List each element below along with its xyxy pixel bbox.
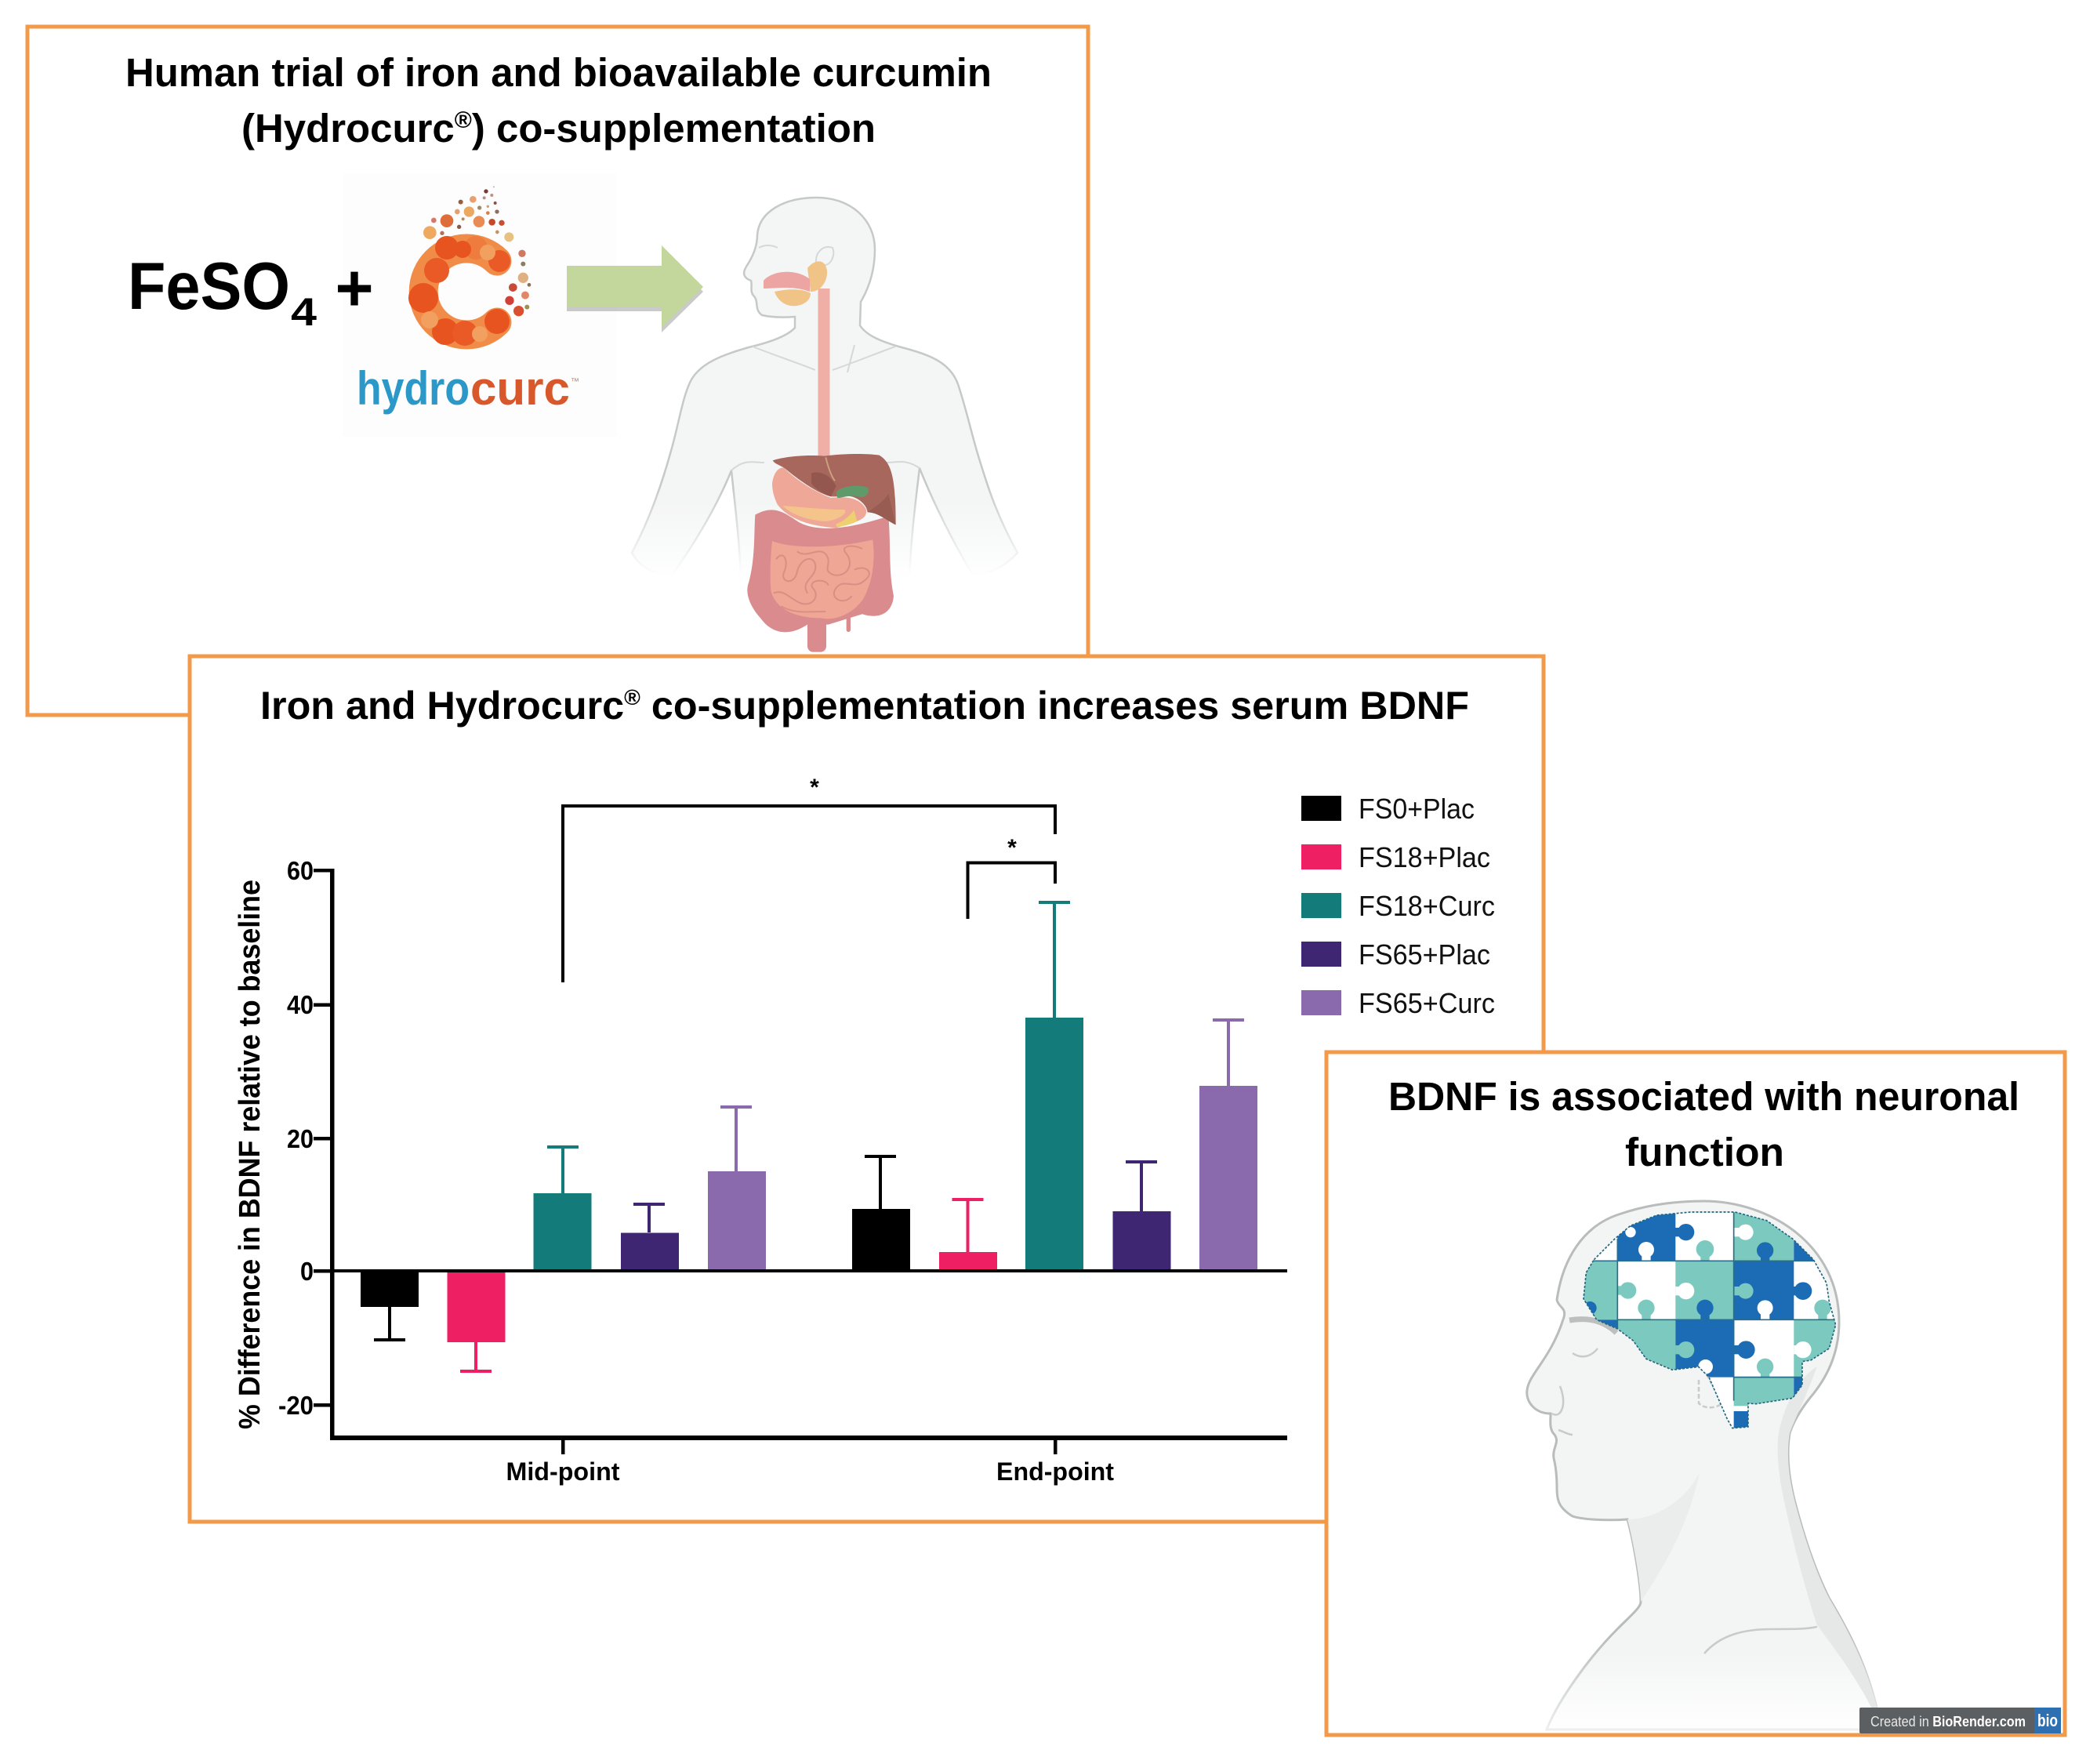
panel border: BDNF chart [190,656,1544,1522]
illustration: head with puzzle brain [1527,1201,1881,1730]
heading: neuronal function [1388,1074,2019,1174]
legend: FS65+Curc [1359,987,1495,1019]
puzzle pieces [1617,1210,1675,1261]
legend: FS0+Plac [1359,793,1475,825]
body silhouette [632,198,1018,592]
puzzle brain [1578,1210,1840,1432]
legend: FS65+Plac [1359,938,1490,971]
significance stars: * [1007,835,1017,861]
salivary glands [775,261,827,306]
mid-point bars [361,1171,766,1342]
abdominal organs [747,454,896,652]
body contour lines [731,245,920,470]
legend: FS18+Curc [1359,890,1495,922]
y axis labels [278,856,314,1420]
badge: BioRender credit [1859,1708,2061,1733]
end-point bars [852,1018,1257,1271]
logo dots [423,186,531,316]
significance stars [810,775,1017,861]
puzzle knobs [1584,1224,1812,1359]
y axis labels: 40 [287,990,314,1019]
error bars [374,902,1244,1371]
heading: human trial: Human trial of iron and bioavailable curcumin [125,50,992,95]
puzzle seams [1586,1213,1834,1401]
legend: FS18+Plac [1359,841,1490,873]
badge: BioRender credit: bio [2037,1711,2058,1730]
logo wordmark [357,362,579,415]
panel border: human trial [27,27,1088,715]
heading: human trial: ® [455,107,472,133]
formula: FeSO4: FeSO [128,249,290,324]
heading: human trial: ) co-supplementation [472,106,876,151]
gallbladder [836,486,869,498]
mouth [764,272,810,292]
panel: human trial [27,27,1088,715]
y axis labels: 20 [287,1124,314,1153]
stomach [772,467,866,528]
brain outline [1584,1212,1836,1428]
panel: BDNF chart [190,656,1544,1522]
badge: BioRender credit: Created in BioRender.com [1870,1714,2026,1730]
small intestine [771,539,874,619]
icon: hydrocurc logo [343,174,617,437]
arrow: to body [567,245,703,332]
legend [1301,793,1495,1019]
significance stars: * [810,775,819,800]
y axis title: % Difference in BDNF relative to baseline [234,880,267,1429]
heading: human trial: (Hydrocurc [241,106,455,151]
y axis and ticks [314,869,334,1440]
x axis labels: End-point [996,1457,1114,1486]
heading: neuronal function: BDNF is associated with neuronal [1388,1074,2019,1119]
significance brackets [563,806,1055,982]
face and shoulder lines [1552,1319,1817,1653]
illustration: human digestive system [632,198,1018,652]
logo wordmark: ™ [571,377,579,387]
x axis labels: Mid-point [506,1457,620,1486]
head silhouette [1527,1201,1881,1730]
formula: FeSO4: 4 [291,290,317,334]
logo wordmark: hydro [357,362,470,415]
heading: BDNF chart: co-supplementation increases serum BDNF [640,684,1469,728]
large intestine [747,510,894,632]
pancreas [782,506,845,521]
x axis labels [506,1457,1114,1486]
logo wordmark: curc [470,362,570,415]
zero line and x axis [330,1269,1287,1454]
panel border: neuronal function [1326,1052,2065,1735]
y axis labels: 0 [300,1257,314,1286]
y axis labels: -20 [278,1391,314,1420]
esophagus [818,289,829,459]
heading: BDNF chart: Iron and Hydrocurc [260,684,622,728]
heading: neuronal function: function [1625,1130,1784,1174]
panel: BDNF and neuronal function [1326,1052,2065,1735]
y axis labels: 60 [287,856,314,885]
chart: percent difference in BDNF [234,775,1287,1486]
liver [773,454,896,524]
formula: plus sign: + [335,251,374,325]
heading: BDNF chart: ® [624,685,640,710]
heading: human trial [125,50,992,151]
